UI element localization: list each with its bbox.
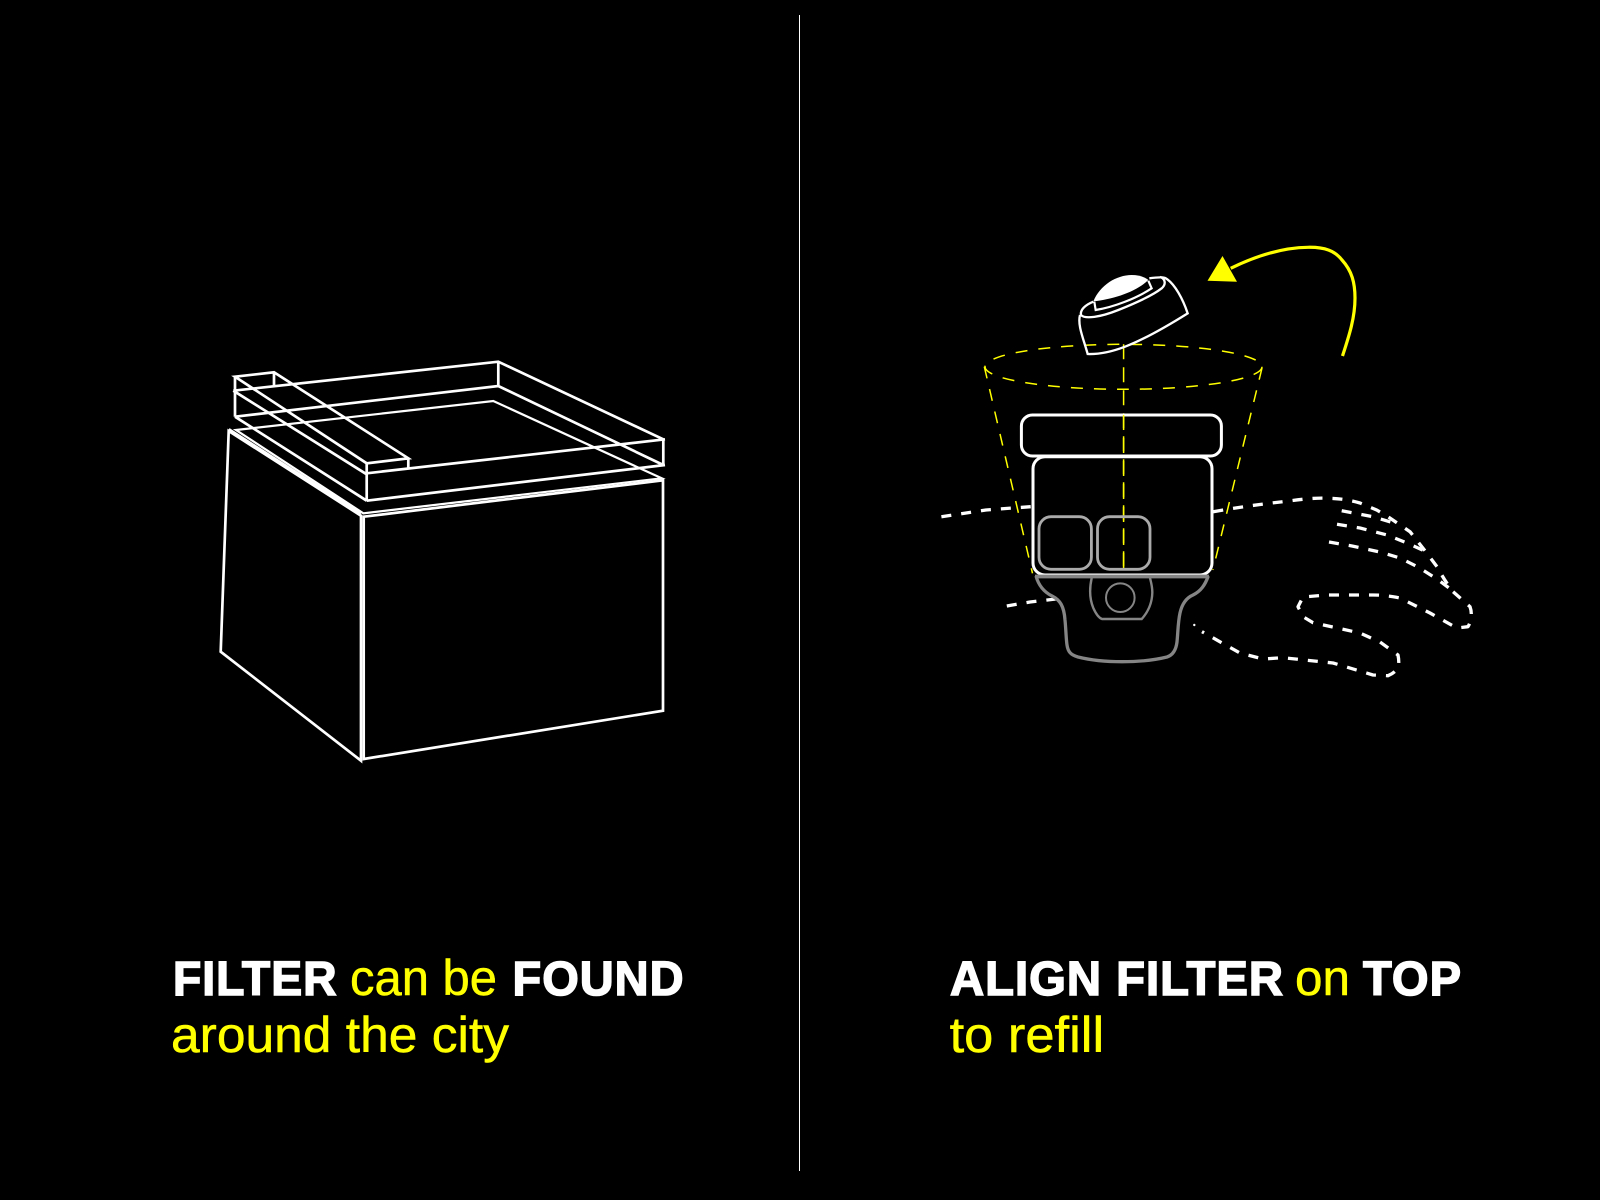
caption: left: can be xyxy=(350,950,497,1006)
caption: left: FOUND xyxy=(512,953,684,1006)
caption: left xyxy=(171,950,684,1063)
box top left edge xyxy=(229,429,361,514)
tray on top of box xyxy=(233,362,665,501)
caption: right: to refill xyxy=(950,1007,1104,1063)
box left face xyxy=(221,431,361,761)
panel: filter station box illustration xyxy=(221,362,665,761)
filter cap being placed xyxy=(1079,275,1188,354)
panel: alignment illustration xyxy=(941,247,1471,676)
yellow axis inside head xyxy=(1123,415,1125,570)
caption: right: TOP xyxy=(1363,953,1462,1006)
caption: left: FILTER xyxy=(173,953,338,1006)
yellow curved arrow xyxy=(1208,247,1355,356)
refill head body xyxy=(1033,457,1212,575)
caption: right xyxy=(950,950,1462,1063)
hand outline dashed xyxy=(941,498,1471,676)
alignment cone dashed xyxy=(984,344,1262,573)
box right face xyxy=(364,480,663,759)
caption: right: on xyxy=(1295,950,1350,1006)
filter strip on tray xyxy=(235,372,408,469)
caption: left: around the city xyxy=(171,1007,509,1063)
right window xyxy=(1098,517,1150,569)
left window xyxy=(1039,517,1091,569)
divider between panels xyxy=(798,15,800,1171)
head base xyxy=(1035,576,1209,662)
box top face xyxy=(236,401,662,513)
caption: right: ALIGN FILTER xyxy=(950,953,1284,1006)
refill head top cap xyxy=(1021,415,1221,456)
